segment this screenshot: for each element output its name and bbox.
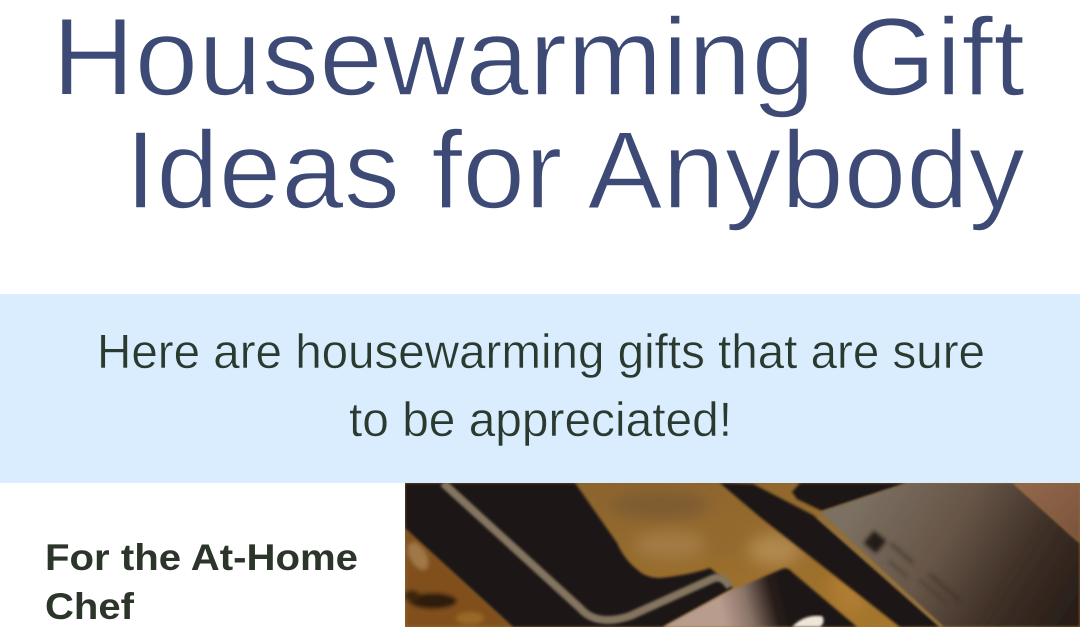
blade engraving — [864, 531, 962, 604]
dark wedge at top — [792, 483, 907, 511]
banner text: Here are housewarming gifts that are sure — [97, 326, 985, 379]
dark band beside blade — [720, 483, 940, 627]
knife bolster — [663, 568, 857, 627]
section heading: For the At-Home — [45, 537, 358, 578]
section heading: Chef — [45, 586, 135, 627]
wood corner, right — [1013, 483, 1080, 543]
blade edge highlight — [818, 517, 942, 627]
banner text: to be appreciated! — [349, 394, 732, 447]
wood corner, left — [404, 528, 513, 627]
title — [52, 0, 1025, 232]
wood grain — [610, 491, 870, 616]
knife blade — [820, 483, 1080, 627]
knife handle inlay line — [443, 483, 730, 620]
panel: intro banner — [0, 294, 1080, 483]
section heading — [45, 537, 358, 627]
banner text — [97, 326, 985, 447]
knife handle, dark — [405, 483, 733, 627]
photo: kitchen knives on a wooden board — [404, 483, 1080, 627]
bolster highlight — [792, 616, 824, 627]
title: Ideas for Anybody — [125, 109, 1025, 232]
